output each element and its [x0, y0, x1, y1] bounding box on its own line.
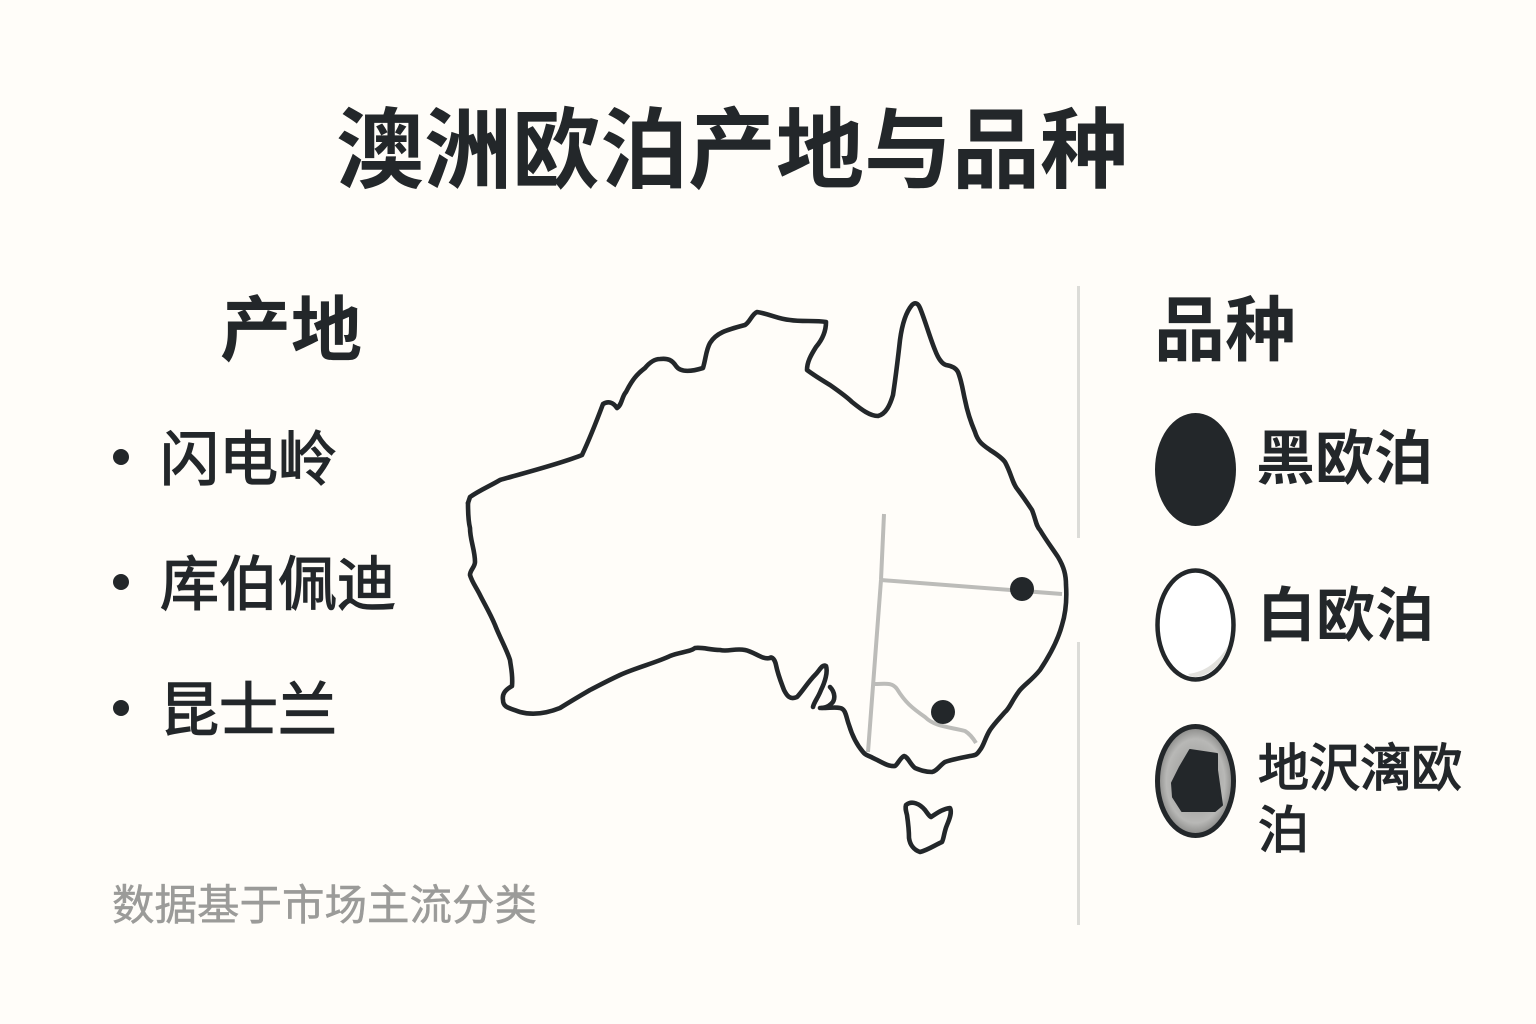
- map: mainland outline: [468, 303, 1066, 772]
- icon: black opal: [1155, 413, 1236, 526]
- list item: Queensland: 昆士兰: [160, 678, 337, 744]
- label: boulder opal: 地沢漓欧泊: [1258, 740, 1462, 859]
- divider bottom: [1077, 642, 1080, 925]
- heading: varieties: 品种: [1154, 292, 1296, 371]
- map marker: Coober Pedy: [931, 700, 955, 724]
- divider top: [1077, 286, 1080, 538]
- title: 澳洲欧泊产地与品种: [336, 101, 1128, 200]
- heading: origins: 产地: [220, 292, 362, 371]
- panel: origins: [113, 292, 396, 744]
- map: gulf and southern coast: [468, 503, 834, 714]
- label: white opal: 白欧泊: [1257, 583, 1434, 649]
- list item: Coober Pedy: 库伯佩迪: [160, 552, 396, 618]
- map: Tasmania: [906, 803, 951, 852]
- label: black opal: 黑欧泊: [1256, 426, 1433, 492]
- icon: white opal: [1158, 570, 1234, 680]
- icon: boulder opal: [1158, 726, 1234, 836]
- map marker: Lightning Ridge: [1010, 577, 1034, 601]
- list item: Lightning Ridge: 闪电岭: [160, 427, 337, 493]
- map: state borders: [868, 514, 1062, 752]
- footnote: 数据基于市场主流分类: [112, 883, 537, 930]
